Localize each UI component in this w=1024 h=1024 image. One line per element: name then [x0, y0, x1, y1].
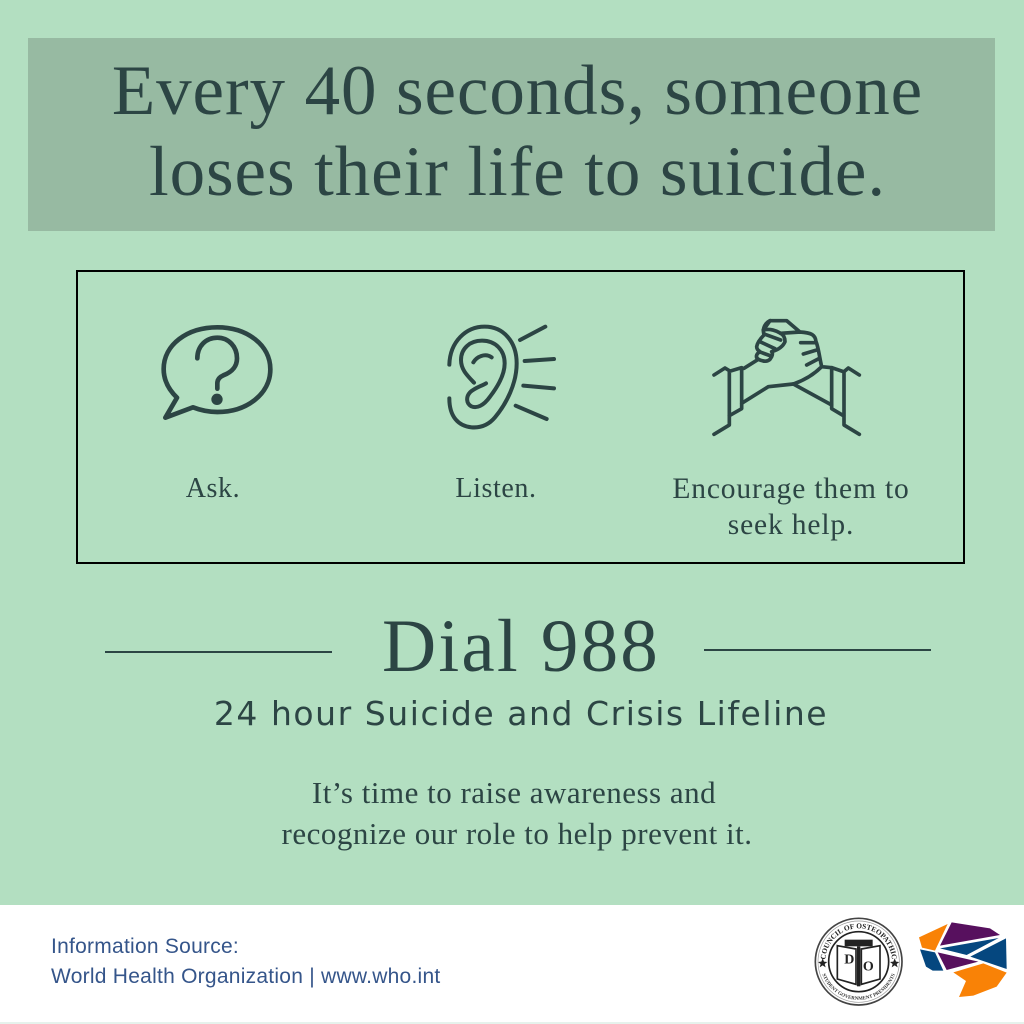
subheading: 24 hour Suicide and Crisis Lifeline	[214, 694, 828, 733]
icon: ear with sound lines	[447, 324, 556, 430]
title text	[112, 52, 923, 211]
logo: colored brain	[919, 922, 1007, 997]
footer	[0, 905, 1024, 1024]
source text: Information Source:	[51, 935, 239, 958]
panel: three actions	[76, 270, 965, 564]
icon: speech bubble with question mark	[161, 325, 273, 420]
logo: council seal: COUNCIL OF OSTEOPATHIC	[820, 923, 897, 960]
title text: Every 40 seconds, someone	[112, 52, 923, 130]
label: encourage	[672, 473, 910, 541]
label: encourage: Encourage them to	[672, 473, 910, 505]
label: listen: Listen.	[455, 473, 537, 504]
icon: clasped hands	[712, 318, 862, 436]
divider right	[704, 649, 931, 651]
logo: council seal: D	[844, 953, 854, 968]
source text: World Health Organization | www.who.int	[51, 964, 440, 988]
source text	[51, 935, 440, 988]
title text: loses their life to suicide.	[149, 133, 886, 211]
awareness text	[282, 775, 752, 851]
logo: council seal	[814, 918, 903, 1006]
label: encourage: seek help.	[728, 509, 854, 541]
awareness text: recognize our role to help prevent it.	[282, 816, 752, 851]
logo: council seal: O	[863, 959, 874, 974]
divider left	[105, 651, 332, 653]
title banner	[28, 38, 995, 231]
label: ask: Ask.	[186, 473, 240, 504]
heading: dial 988: Dial 988	[382, 605, 660, 688]
awareness text: It’s time to raise awareness and	[312, 775, 716, 810]
logo: council seal: STUDENT GOVERNMENT PRESIDENTS	[822, 974, 895, 1000]
